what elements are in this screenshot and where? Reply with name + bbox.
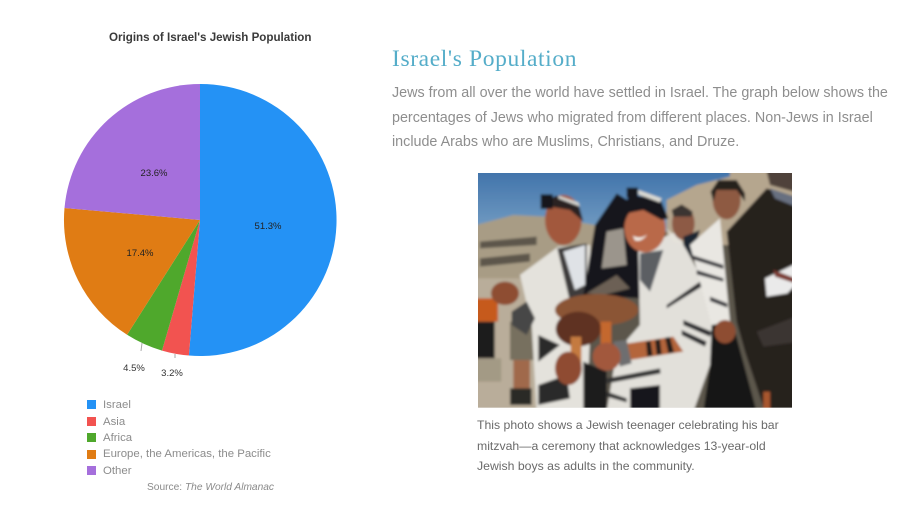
photo caption: mitzvah—a ceremony that acknowledges 13-year-old [477, 439, 766, 453]
intro text [392, 85, 888, 150]
legend: Africa [103, 432, 132, 444]
man left [520, 245, 592, 412]
photo caption: Jewish boys as adults in the community. [477, 459, 695, 473]
crowd left [470, 298, 498, 322]
man right [690, 218, 730, 325]
boy's arm and hands [617, 337, 683, 360]
photo caption [477, 418, 779, 473]
intro text: percentages of Jews who migrated from different places. Non-Jews in Israel [392, 110, 873, 126]
chart title: Origins of Israel's Jewish Population [109, 31, 311, 44]
boy [607, 232, 713, 412]
legend: Europe, the Americas, the Pacific [103, 448, 271, 460]
intro text: Jews from all over the world have settled in Israel. The graph below shows the [392, 85, 888, 101]
source note: Source: The World Almanac [147, 482, 274, 493]
buildings [470, 215, 595, 280]
lower fringe area [583, 362, 607, 412]
legend: Other [103, 465, 132, 477]
photo: bar mitzvah celebration [478, 173, 792, 408]
pie chart: 23.6% [141, 168, 168, 179]
pie chart: 3.2% [161, 368, 183, 379]
torah scroll [583, 193, 640, 298]
legend: Israel [103, 399, 131, 411]
man at rear [672, 207, 695, 240]
pie chart: 4.5% [123, 363, 145, 374]
pie chart: 51.3% [255, 221, 282, 232]
heading: Israel's Population [392, 46, 577, 72]
pie chart: 17.4% [127, 248, 154, 259]
man foreground dark coat [726, 187, 792, 408]
legend [87, 399, 271, 477]
legend: Asia [103, 416, 125, 428]
intro text: include Arabs who are Muslims, Christians, and Druze. [392, 134, 739, 150]
photo caption: This photo shows a Jewish teenager celebrating his bar [477, 418, 779, 432]
